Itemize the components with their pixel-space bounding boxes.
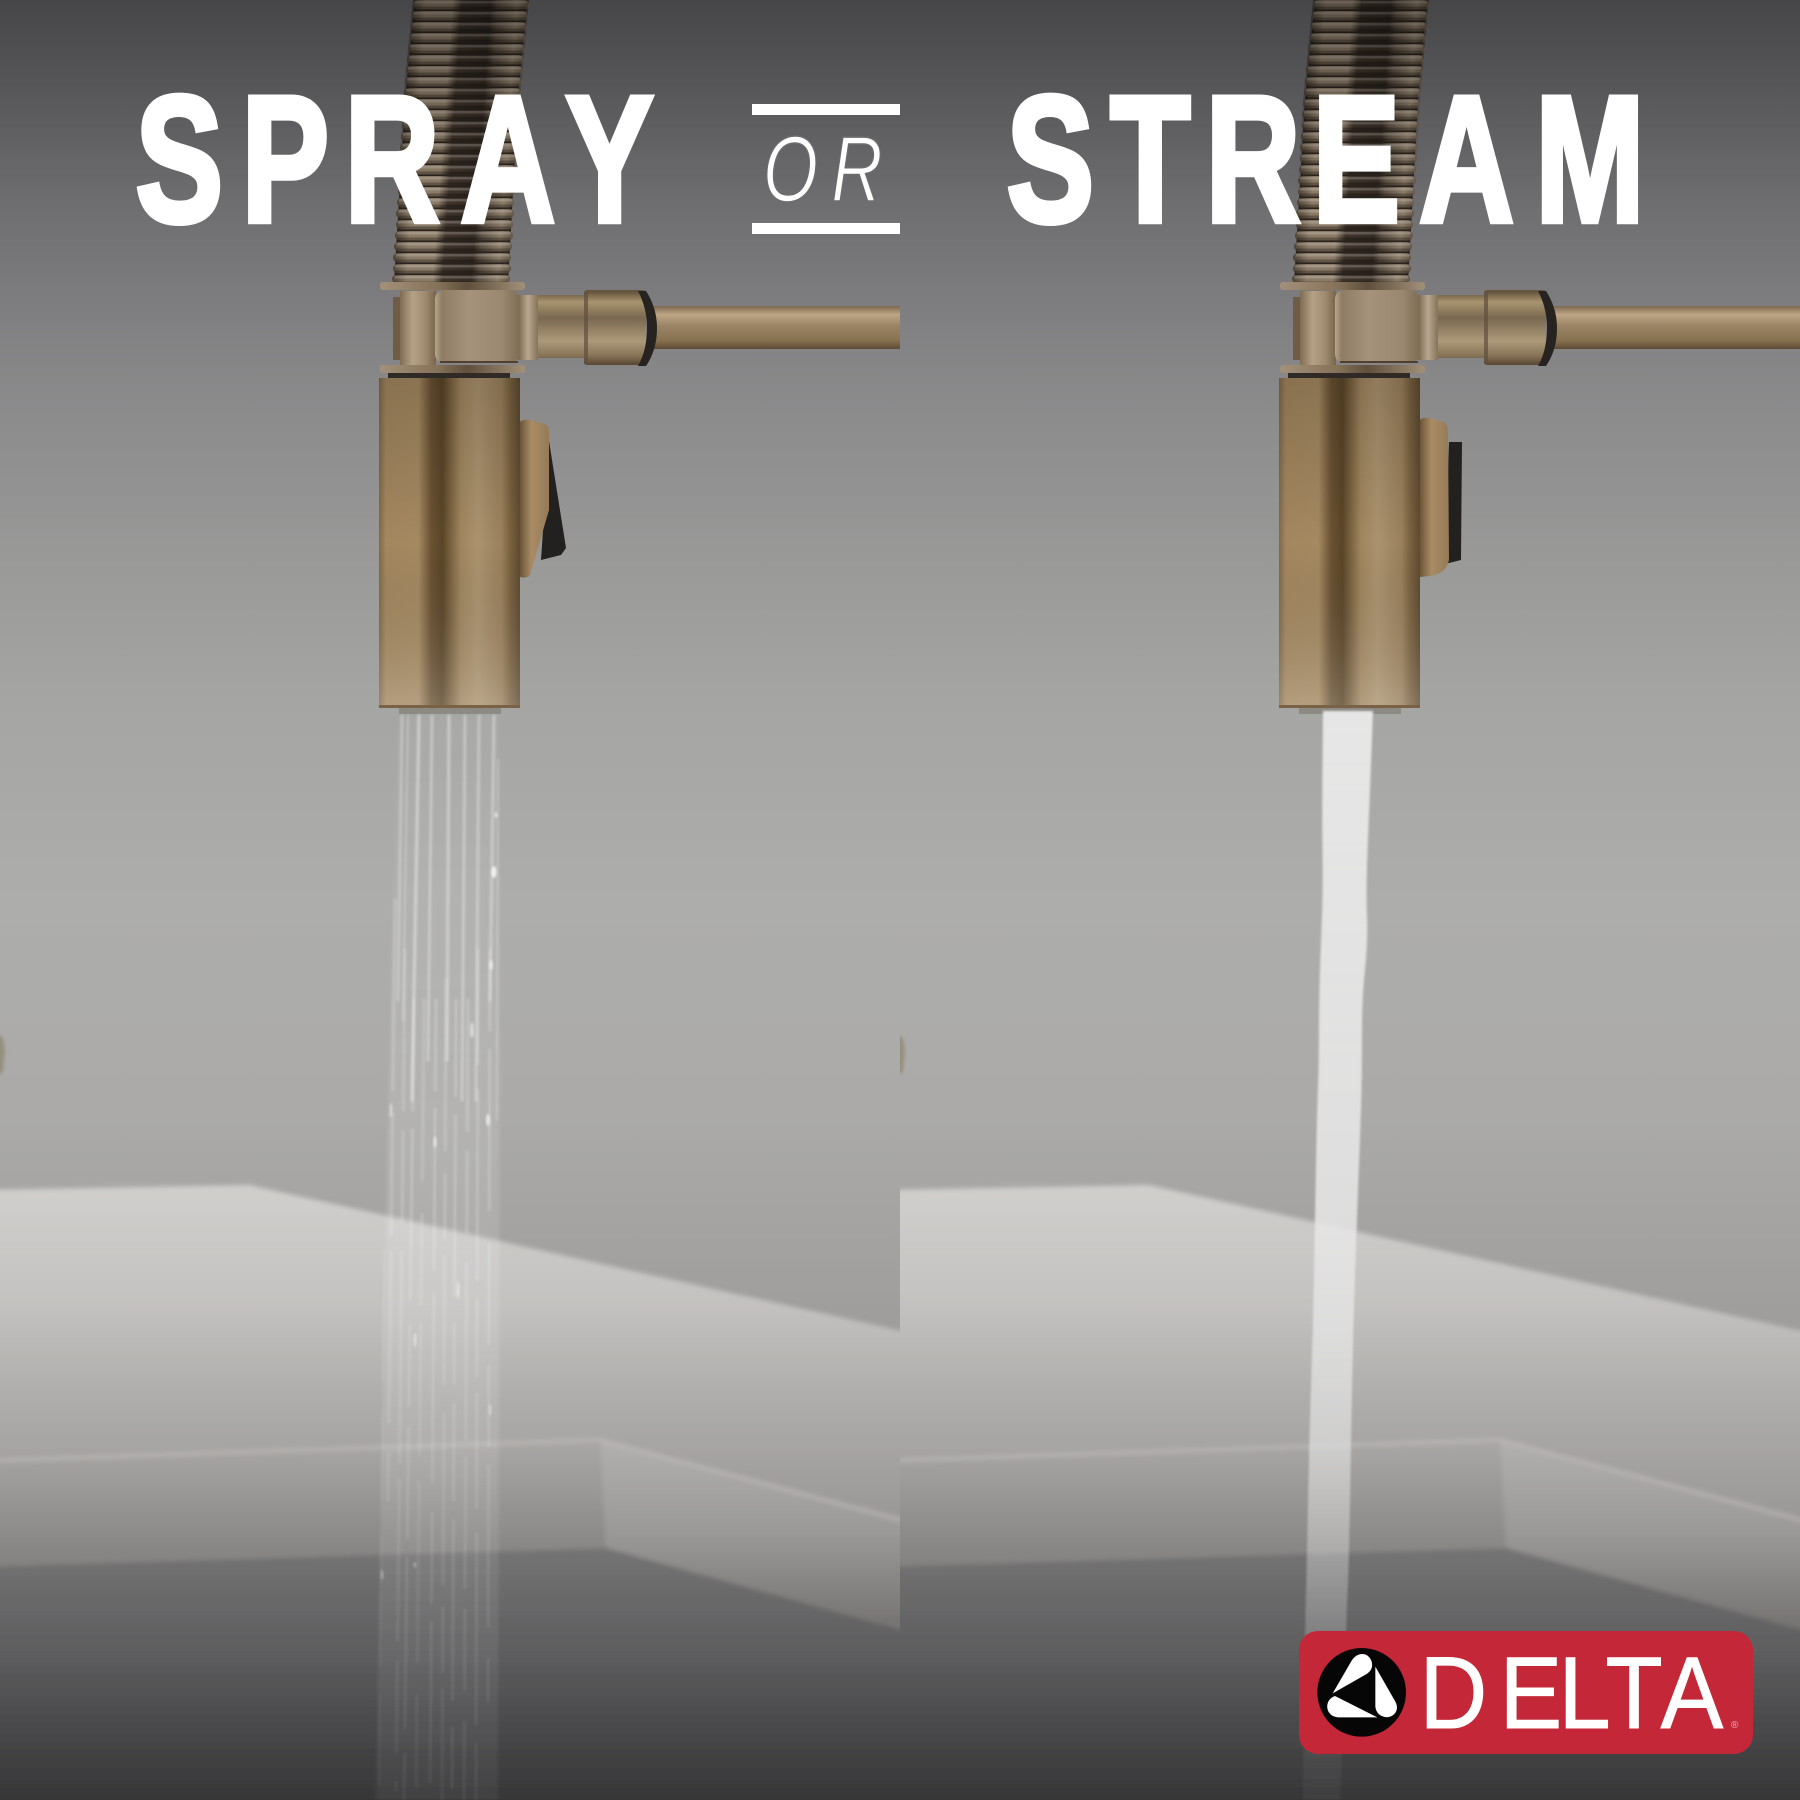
hub xyxy=(1293,290,1438,365)
button xyxy=(1420,418,1449,577)
black trigger xyxy=(541,441,566,560)
icon: Delta triangle mark xyxy=(1317,1648,1406,1737)
countertop and sink xyxy=(880,1185,1800,1800)
wordmark: DELTA xyxy=(1420,1635,1724,1750)
hose xyxy=(1292,0,1429,284)
divider word: OR: OR xyxy=(763,117,882,221)
title: SPRAY: SPRAY xyxy=(135,59,653,260)
faucet xyxy=(1279,0,1800,714)
nozzle strip xyxy=(399,708,501,714)
collar xyxy=(1437,290,1546,365)
panel: spray xyxy=(0,0,920,1800)
arm xyxy=(650,306,900,349)
panel: stream xyxy=(880,0,1800,1800)
spray water xyxy=(376,716,500,1800)
logo: Delta xyxy=(1299,1631,1753,1754)
stream water xyxy=(1303,711,1373,1800)
hub xyxy=(393,290,538,365)
black trigger xyxy=(1448,442,1462,564)
registered mark: ® xyxy=(1731,1720,1739,1731)
spray head body xyxy=(379,378,520,708)
divider word: OR xyxy=(752,104,900,234)
arm xyxy=(1550,306,1800,349)
distant tap edge xyxy=(0,1033,5,1076)
flanges xyxy=(380,282,525,290)
hose xyxy=(392,0,529,284)
wall background xyxy=(900,0,1800,1332)
nozzle strip xyxy=(1299,708,1401,714)
title: STREAM: STREAM xyxy=(1007,59,1645,260)
black ring xyxy=(638,291,657,366)
flanges xyxy=(1280,282,1425,290)
faucet xyxy=(379,0,900,714)
collar xyxy=(537,290,646,365)
wall background xyxy=(0,0,900,1332)
black ring xyxy=(1538,291,1557,366)
button xyxy=(520,420,549,578)
countertop and sink xyxy=(0,1185,920,1800)
spray head body xyxy=(1279,378,1420,708)
distant tap edge xyxy=(900,1034,906,1075)
